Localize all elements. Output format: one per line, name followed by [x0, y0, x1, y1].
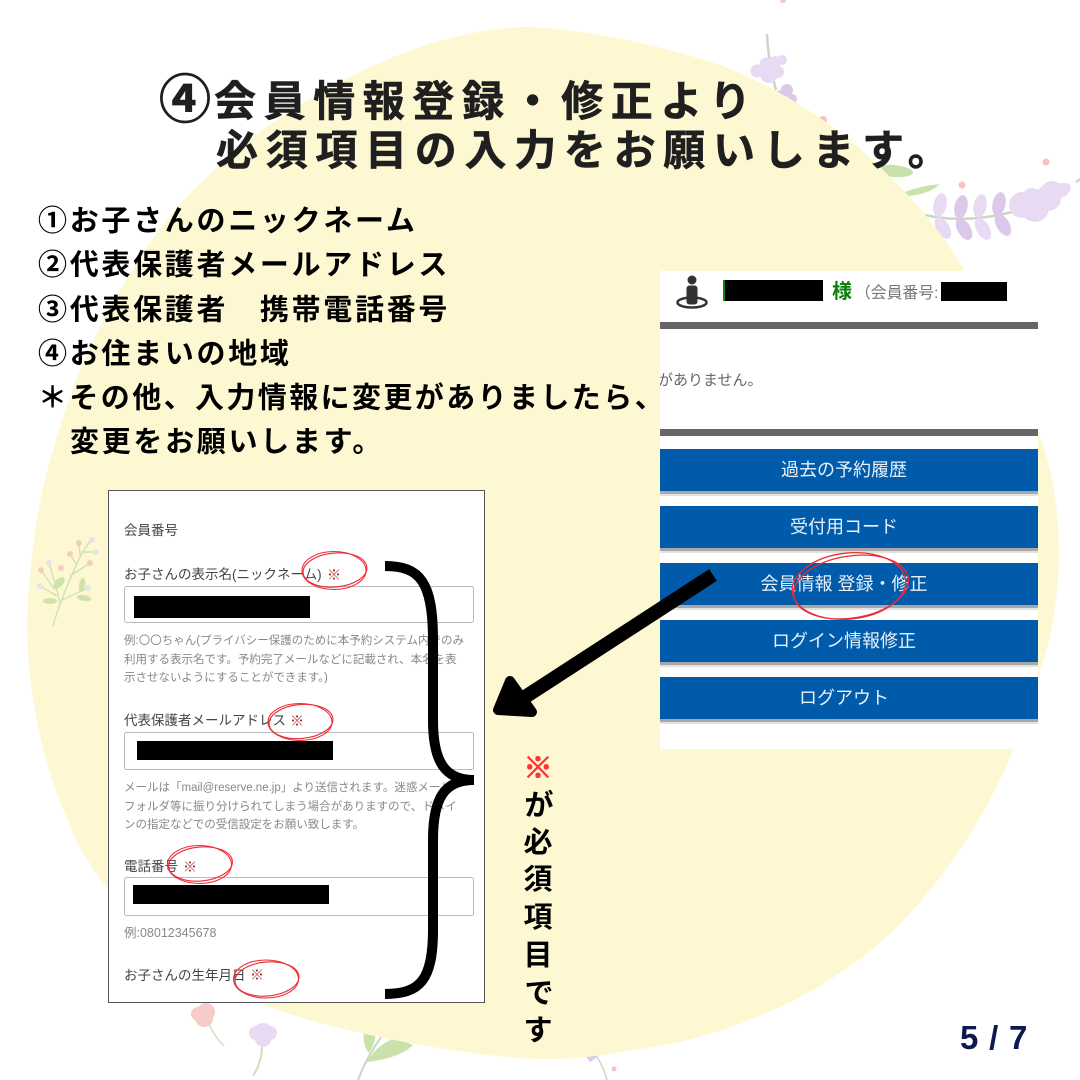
field: nickname: お子さんの表示名(ニックネーム) [124, 567, 322, 582]
help text: phone: 例:08012345678 [124, 926, 216, 940]
required items list: ①お子さんのニックネーム [38, 204, 418, 238]
field: birthdate: ※ [250, 967, 264, 983]
screenshot panel: member menu [658, 271, 1038, 749]
title: 必須項目の入力をお願いします。 [216, 127, 957, 174]
menu button: logout [660, 677, 1038, 724]
required items list: ③代表保護者 携帯電話番号 [38, 294, 450, 326]
help text: nickname: 例:〇〇ちゃん(プライバシー保護のために本予約システム内でのみ [124, 633, 464, 647]
member name [723, 280, 1007, 303]
help text: nickname: 示させないようにすることができます。) [124, 670, 328, 684]
menu button: member info [660, 563, 1038, 610]
lavender decoration: top right [750, 0, 1080, 243]
title: 会員情報登録・修正より [214, 78, 759, 125]
field: email: ※ [290, 713, 304, 729]
required items list: ②代表保護者メールアドレス [38, 248, 450, 282]
field: birthdate: お子さんの生年月日 [124, 968, 246, 983]
vertical note: required items: す [523, 1015, 553, 1047]
menu button: login info: ログイン情報修正 [772, 631, 916, 651]
member name: （会員番号: [855, 284, 938, 302]
field: phone: ※ [183, 859, 197, 875]
red circles on required marks [167, 550, 368, 999]
red circle on member info button [789, 547, 913, 627]
field: nickname: ※ [327, 567, 341, 583]
help text: email: メールは「mail@reserve.ne.jp」より送信されます。迷惑メール [124, 780, 452, 794]
field label: member number: 会員番号 [124, 523, 178, 538]
help text: email: ンの指定などでの受信設定をお願い致します。 [124, 817, 364, 831]
field: email [124, 713, 474, 770]
title [159, 72, 957, 174]
required items list [38, 204, 666, 458]
vertical note: required items: 項 [523, 902, 553, 934]
field: nickname [124, 567, 474, 622]
required items list: ＊その他、入力情報に変更がありましたら、 [38, 380, 666, 414]
menu button: reception code [660, 506, 1038, 553]
vertical note: required items: が [524, 788, 554, 822]
page number: 5 / 7 [960, 1019, 1028, 1056]
title: ④ [159, 72, 211, 130]
field: phone: 電話番号 [124, 859, 178, 874]
menu button: history [660, 449, 1038, 496]
vertical note: required items: で [524, 978, 554, 1010]
curly brace [385, 566, 474, 994]
vertical note: required items: 目 [523, 940, 553, 972]
vertical note: required items: 須 [523, 864, 553, 896]
help text: email [124, 780, 457, 831]
menu button: member info: 会員情報 登録・修正 [760, 574, 928, 594]
arrow: menu to form [498, 575, 713, 712]
notice text: がありません。 [658, 372, 763, 389]
help text: nickname [124, 633, 464, 684]
member name: 様 [832, 280, 852, 303]
required items list: ④お住まいの地域 [38, 338, 292, 370]
menu button: logout: ログアウト [799, 688, 889, 708]
menu button: login info [660, 620, 1038, 667]
field: email: 代表保護者メールアドレス [124, 713, 286, 728]
decorative sprig on blob [37, 537, 99, 626]
vertical note: required items: ※ [523, 753, 553, 785]
screenshot panel: registration form [108, 490, 484, 1002]
menu button: history: 過去の予約履歴 [781, 460, 907, 480]
help text: nickname: 利用する表示名です。予約完了メールなどに記載され、本名を表 [124, 652, 457, 666]
flower decoration: bottom [191, 1003, 616, 1080]
menu button: reception code: 受付用コード [790, 517, 898, 537]
icon: person [678, 276, 706, 308]
field: phone [124, 859, 474, 916]
required items list: 変更をお願いします。 [70, 426, 384, 458]
help text: email: フォルダ等に振り分けられてしまう場合がありますので、ドメイ [124, 799, 457, 813]
vertical note: required items [523, 753, 554, 1047]
vertical note: required items: 必 [523, 826, 553, 859]
